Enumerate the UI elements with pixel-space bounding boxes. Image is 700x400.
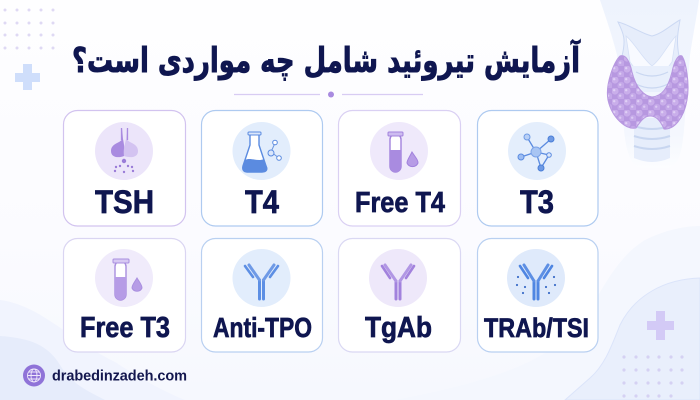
footer: website: [23, 364, 187, 386]
label: Anti-TPO: Anti-TPO: [213, 312, 312, 343]
decoration: top-left dot grid: [4, 8, 54, 50]
panel: T4: [202, 110, 322, 226]
icon: molecule: [508, 122, 566, 180]
label: TgAb: TgAb: [365, 312, 432, 344]
label: TRAb/TSI: TRAb/TSI: [484, 313, 589, 343]
decoration: bottom-right dot grid: [622, 355, 684, 398]
label: Free T4: Free T4: [355, 187, 445, 219]
icon: globe: [23, 364, 45, 386]
icon: pituitary gland: [95, 122, 153, 180]
panel: Anti-TPO: [202, 238, 322, 352]
icon: flask with molecule: [232, 122, 290, 180]
label: T3: T3: [520, 184, 554, 220]
icon: antibody: [232, 249, 290, 307]
panel: TSH: [64, 110, 186, 226]
icon: antibody with dots: [507, 249, 565, 307]
label: Free T3: Free T3: [80, 312, 170, 344]
divider: [234, 92, 423, 98]
icon: test tube and drop: [370, 122, 428, 180]
icon: test tube and drop: [95, 249, 153, 307]
illustration: thyroid gland and trachea: [600, 0, 699, 168]
panel: Free T3: [64, 238, 186, 352]
panel: T3: [478, 110, 598, 226]
icon: blue plus left: [15, 64, 40, 90]
label: TSH: TSH: [95, 184, 154, 220]
text: website address: drabedinzadeh.com: [52, 368, 187, 384]
icon: lavender plus right: [647, 311, 674, 340]
icon: antibody: [369, 249, 427, 307]
panel: TRAb/TSI: [478, 238, 598, 352]
label: T4: T4: [245, 184, 279, 220]
panel: TgAb: [338, 238, 460, 352]
panel: Free T4: [338, 110, 460, 226]
